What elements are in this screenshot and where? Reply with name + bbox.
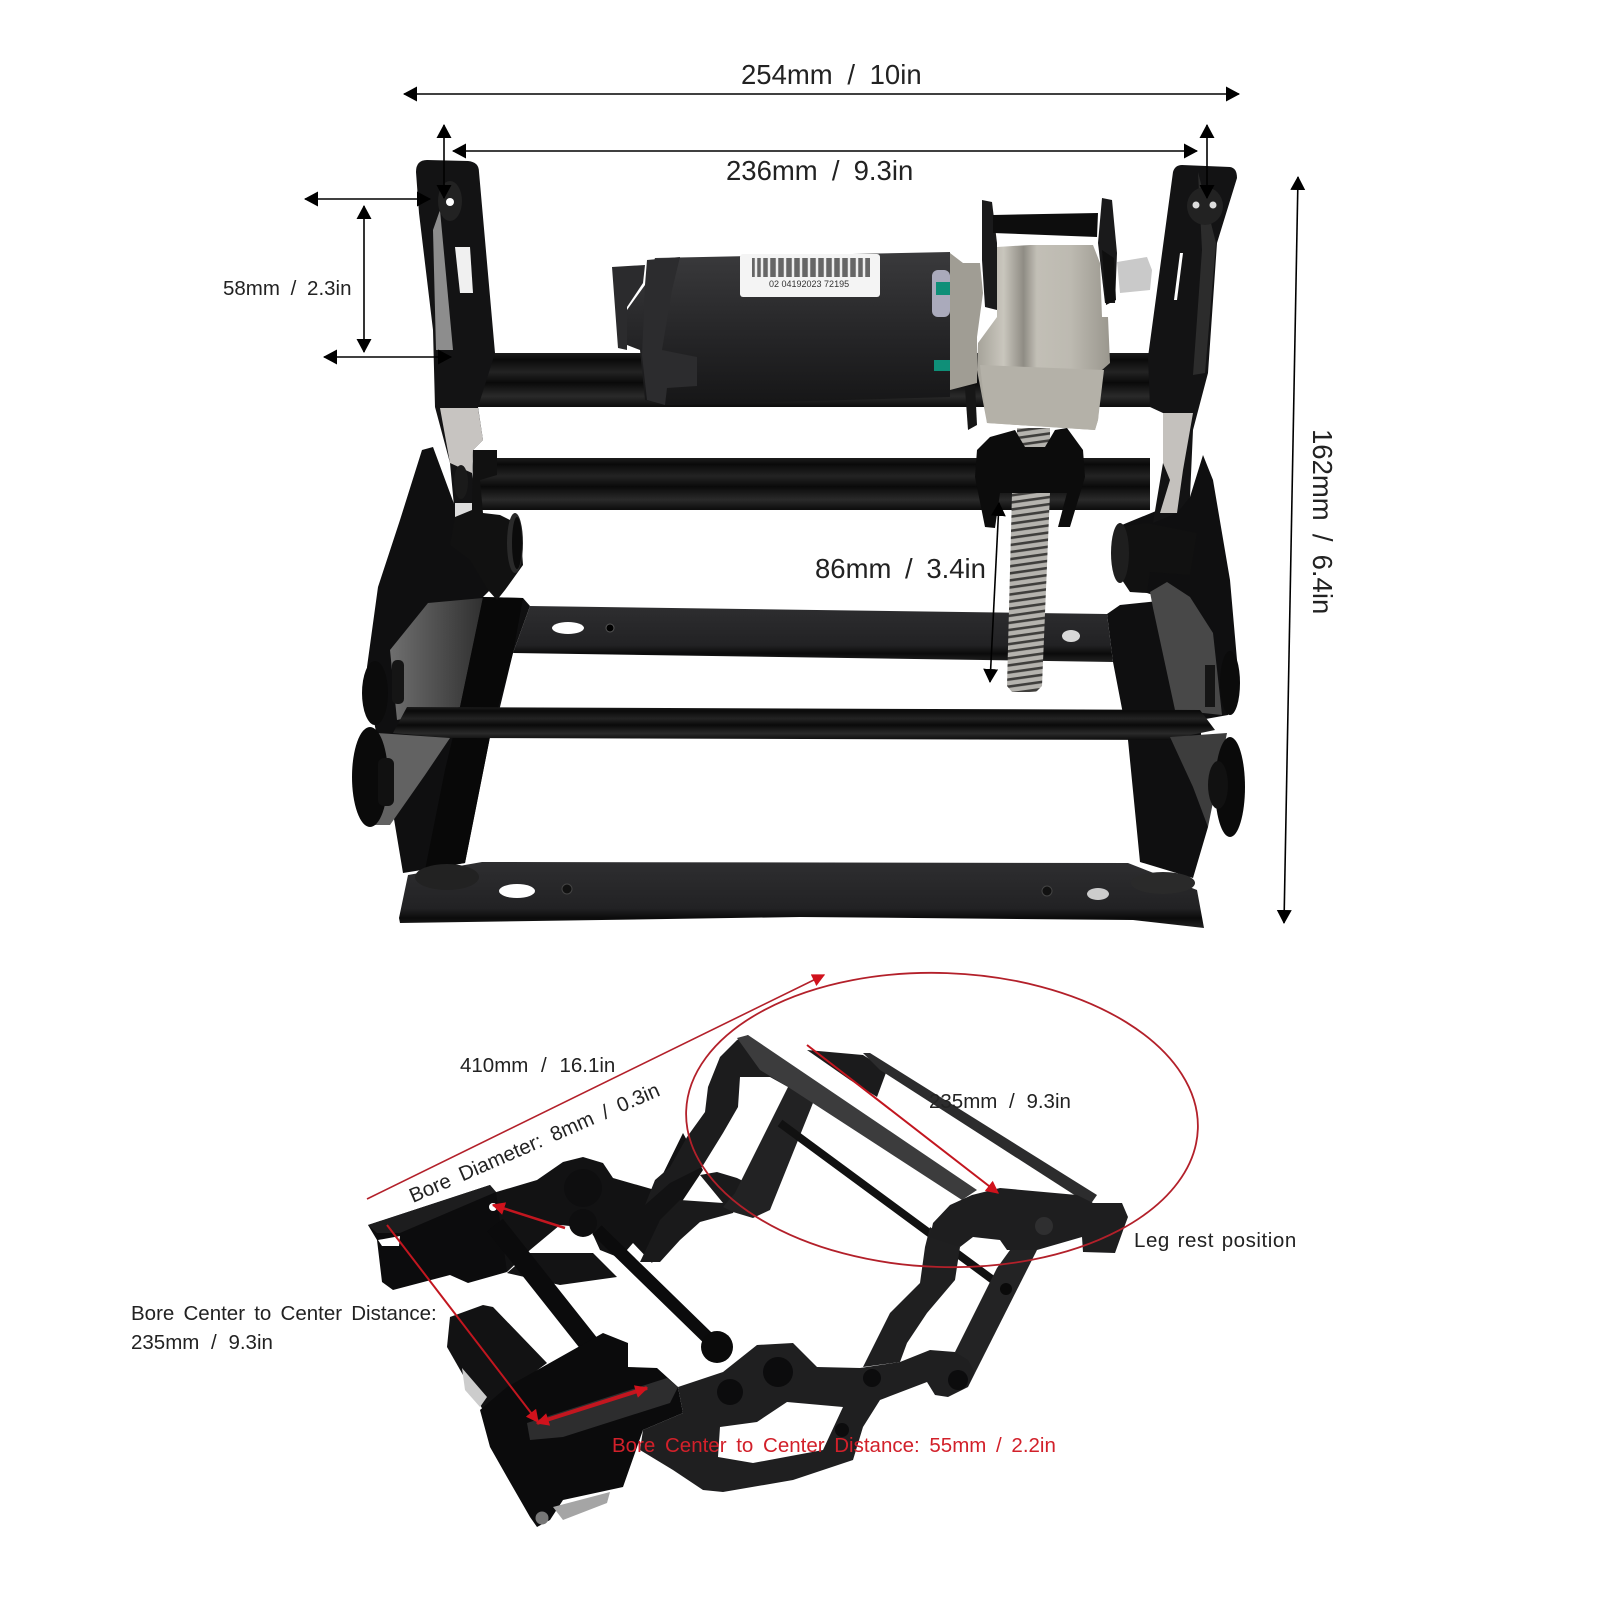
- right upper bracket: [1148, 165, 1237, 523]
- dimension: 254mm width: 254mm / 10in: [741, 59, 922, 90]
- left collar flange: [450, 450, 523, 600]
- rod collar: [701, 1331, 733, 1363]
- motor: [447, 1305, 547, 1410]
- motor end bolt: [536, 1512, 548, 1524]
- leg rest bar B: [863, 1053, 1097, 1205]
- motor assembly: [612, 198, 1152, 430]
- scissor lobe band: [640, 1172, 747, 1262]
- label: bore center distance: Bore Center to Center Distance:: [131, 1302, 437, 1325]
- leg rest bar A: [737, 1035, 977, 1200]
- dimension: 236mm width: 236mm / 9.3in: [726, 155, 913, 186]
- pivot: [454, 465, 468, 499]
- bracket side flange: [1193, 172, 1216, 375]
- nut: [1117, 257, 1152, 293]
- dimension: 162mm height: [1284, 177, 1338, 923]
- small bracket foot: [965, 385, 977, 430]
- photo: extended leg rest mechanism: [368, 1035, 1128, 1527]
- arrow: bore center to center long: [387, 1225, 538, 1422]
- label: 235mm leg rest: 235mm / 9.3in: [929, 1090, 1071, 1113]
- dimension: 162mm height: 162mm / 6.4in: [1307, 429, 1338, 614]
- right straight arm: [955, 1250, 1037, 1373]
- upper left pivot disc: [362, 660, 404, 725]
- label: leg rest position: Leg rest position: [1134, 1229, 1297, 1252]
- motor collar: [642, 257, 697, 405]
- dimension: 58mm height: 58mm / 2.3in: [223, 277, 352, 300]
- label: bore center 55mm red: Bore Center to Center Distance: 55mm / 2.2in: [612, 1434, 1056, 1457]
- bottom bar: [399, 862, 1204, 928]
- gear stub: [950, 253, 983, 390]
- arrow: 410mm length: [367, 975, 824, 1199]
- lower left pivot: [352, 727, 450, 827]
- leg rest end block: [930, 1188, 1128, 1295]
- leg rest rod: [780, 1123, 993, 1280]
- light worn patch: [440, 408, 483, 473]
- gear housing: [977, 245, 1110, 430]
- mounting slot: [1174, 253, 1183, 300]
- white tab: [455, 503, 472, 517]
- link bolts: [717, 1357, 968, 1437]
- upper cross plate: [513, 606, 1113, 662]
- light worn patch: [1160, 413, 1193, 513]
- bolt hole: [438, 181, 462, 221]
- label: bore center distance: 235mm / 9.3in: [131, 1331, 273, 1354]
- barcode label: 02 04192023 72195: [769, 279, 849, 289]
- leg rest middle plate: [807, 1050, 887, 1097]
- annotation: leg rest ellipse: [681, 964, 1203, 1276]
- photo: upright lift mechanism: [352, 160, 1245, 928]
- screw yoke: [975, 428, 1085, 528]
- lower bridging strip: [507, 1253, 617, 1285]
- gray left inner plate: [390, 598, 483, 720]
- motor rear grey: [553, 1492, 610, 1520]
- rod pivot top: [564, 1169, 602, 1237]
- right collar flange: [1117, 523, 1197, 593]
- arrow: left bolt vertical: [443, 125, 445, 198]
- left upright dark strip: [425, 597, 523, 870]
- motor bracket mass: [480, 1333, 683, 1527]
- right collar opening: [1111, 523, 1129, 583]
- silver ring and teal tags: [932, 270, 950, 371]
- motor body: [627, 252, 950, 405]
- dimension: 86mm screw: [815, 503, 999, 682]
- lower right pivot: [1170, 733, 1245, 837]
- left upper bracket: [416, 160, 495, 517]
- left collar opening: [507, 513, 523, 573]
- mount bracket: [982, 198, 1117, 310]
- barcode label: [740, 254, 880, 297]
- upper right pivot disc: [1205, 651, 1240, 715]
- lower right frame plate: [1107, 455, 1237, 878]
- horizontal rod: [393, 707, 1215, 740]
- right wavy arm: [863, 1227, 960, 1367]
- screw collar thread: [1017, 428, 1050, 448]
- label: bore diameter: Bore Diameter: 8mm / 0.3in: [406, 1079, 663, 1208]
- gray right inner plate: [1150, 582, 1222, 715]
- connecting tube rods: [495, 1225, 713, 1345]
- second top arm: [723, 1082, 817, 1218]
- arrow: bore center to center short: [537, 1388, 647, 1423]
- arrow: leg rest width: [807, 1045, 998, 1193]
- arrow: bore diameter pointer: [493, 1205, 565, 1228]
- dimension: 86mm screw: 86mm / 3.4in: [815, 553, 986, 584]
- threaded rod: [1007, 493, 1050, 692]
- middle tube: [478, 458, 1150, 510]
- gray arm highlight: [433, 210, 453, 350]
- footplate: [368, 1185, 507, 1290]
- left top arm: [645, 1035, 788, 1205]
- mounting slot: [455, 247, 473, 293]
- label: 410mm: 410mm / 16.1in: [460, 1054, 615, 1077]
- end cap: [612, 265, 645, 350]
- bracket bright strip: [527, 1378, 678, 1440]
- upper scissor link: [490, 1133, 703, 1272]
- label: bore center distance: [131, 1302, 437, 1354]
- big lower link: [640, 1343, 975, 1492]
- bolt hole: [1187, 187, 1223, 225]
- arrow: right bolt vertical: [1206, 125, 1208, 198]
- right stub flange: [1102, 250, 1116, 305]
- lower left frame plate: [367, 447, 530, 873]
- upper tube: [435, 353, 1195, 407]
